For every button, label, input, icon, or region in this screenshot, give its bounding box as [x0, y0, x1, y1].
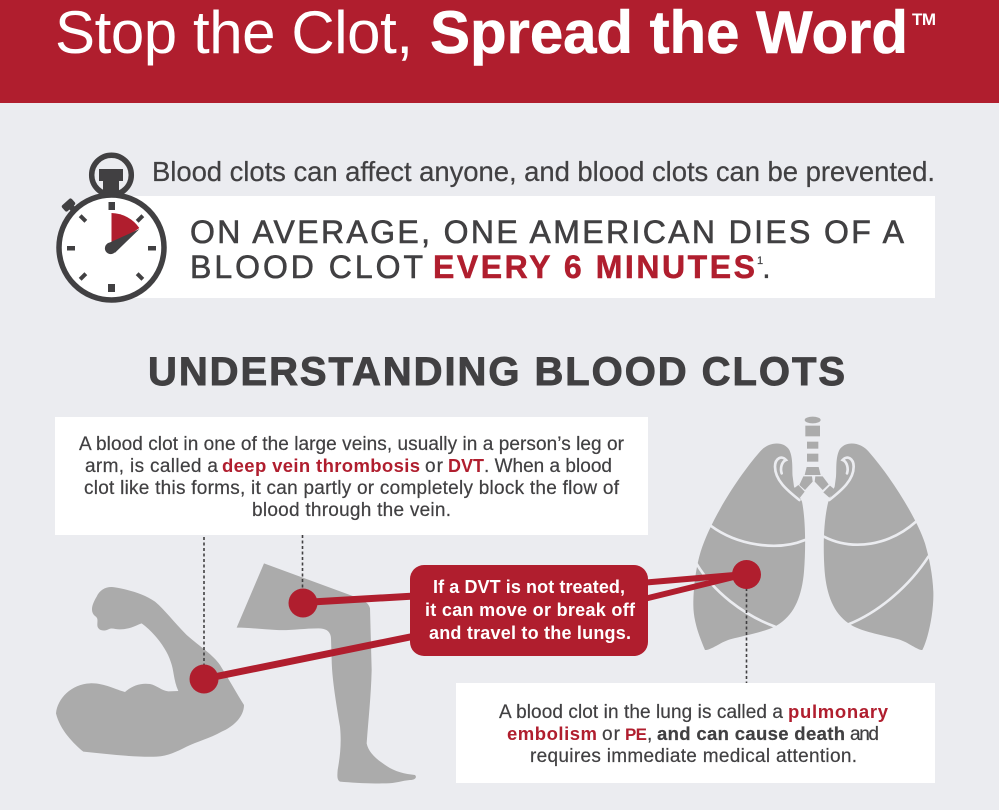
icon: flexed arm	[56, 587, 244, 757]
intro sentence: Blood clots can affect anyone, and blood clots can be prevented.	[152, 156, 935, 187]
panel: DVT definition: or	[425, 456, 444, 477]
statistic band: EVERY 6 MINUTES	[433, 249, 755, 285]
title banner: Spread the Word	[430, 0, 908, 66]
title banner	[0, 0, 999, 103]
panel: PE definition: requires immediate medical attention.	[530, 746, 857, 767]
panel: DVT definition: deep vein thrombosis	[222, 455, 420, 476]
icon: stopwatch	[59, 155, 164, 300]
title banner: Stop the Clot,	[55, 0, 413, 66]
left lung	[693, 444, 805, 650]
dotted connector: lung	[746, 588, 748, 683]
panel: DVT definition: A blood clot in one of the large veins, usually in a person’s leg or	[79, 434, 625, 455]
statistic band: BLOOD CLOT	[190, 249, 423, 285]
panel: DVT definition: clot like this forms, it can partly or completely block the flow of	[84, 478, 620, 499]
icon: bent leg	[237, 563, 416, 784]
dotted connector: leg	[302, 535, 304, 590]
section heading: UNDERSTANDING BLOOD CLOTS	[148, 350, 845, 394]
icon: lungs	[693, 417, 933, 650]
statistic band: 1	[757, 255, 763, 267]
callout: DVT can travel: If a DVT is not treated,	[433, 577, 625, 597]
panel: DVT definition	[55, 417, 648, 535]
lung fissures	[697, 458, 928, 627]
dotted connector: arm	[203, 537, 205, 665]
panel: PE definition: A blood clot in the lung is called a	[499, 702, 783, 723]
trachea	[794, 417, 835, 498]
callout: DVT can travel: it can move or break off	[425, 600, 636, 620]
panel: PE definition: ,	[647, 724, 652, 745]
panel: DVT definition: DVT	[448, 456, 484, 476]
panel: PE definition: and can cause death	[657, 723, 845, 744]
panel: PE definition	[456, 683, 935, 783]
panel: DVT definition: arm, is called a	[85, 456, 218, 477]
right lung	[824, 444, 933, 650]
panel: PE definition: embolism	[507, 723, 597, 744]
statistic band	[112, 196, 935, 298]
panel: DVT definition: blood through the vein.	[252, 500, 451, 521]
callout: DVT can travel: and travel to the lungs.	[429, 623, 631, 643]
panel: PE definition: PE	[625, 725, 647, 744]
red connectors and clot markers	[190, 560, 761, 694]
panel: DVT definition: . When a blood	[484, 456, 612, 477]
panel: PE definition: pulmonary	[788, 701, 889, 722]
statistic band: ON AVERAGE, ONE AMERICAN DIES OF A	[190, 214, 905, 250]
title banner: TM	[912, 10, 936, 29]
callout: DVT can travel	[410, 565, 648, 656]
panel: PE definition: and	[850, 724, 879, 745]
panel: PE definition: or	[602, 724, 621, 745]
statistic band: .	[762, 249, 771, 285]
